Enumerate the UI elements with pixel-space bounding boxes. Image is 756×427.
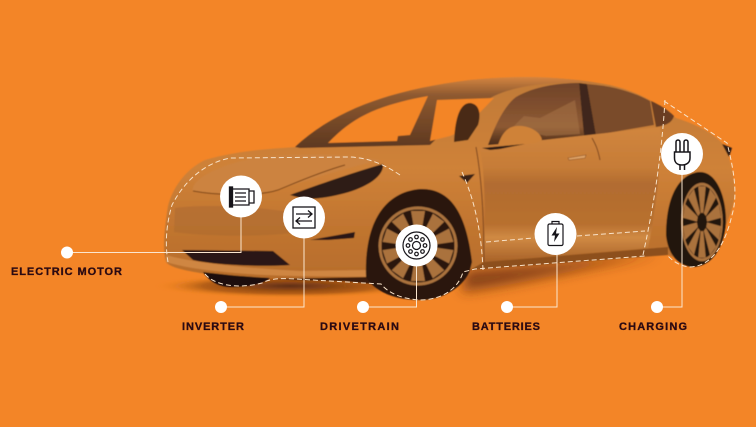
rear wheel bbox=[666, 172, 726, 267]
mirror stalk shadow bbox=[482, 144, 525, 150]
label: inverter: INVERTER bbox=[182, 321, 244, 333]
windshield bbox=[328, 96, 428, 143]
connector: batteries bbox=[501, 240, 557, 313]
side glass seen through cabin bbox=[430, 98, 494, 141]
tail light bbox=[722, 144, 732, 157]
car body bbox=[164, 77, 735, 278]
front left wheel bbox=[203, 272, 270, 287]
front bumper intake bbox=[174, 206, 300, 236]
windshield frame and roof shading bbox=[295, 77, 600, 148]
quarter glass bbox=[651, 101, 674, 127]
underbody bbox=[270, 277, 382, 285]
dashed outline: rear bbox=[643, 100, 735, 267]
door panels bbox=[480, 127, 660, 262]
connector: electric motor bbox=[61, 200, 241, 258]
label: electric motor: ELECTRIC MOTOR bbox=[11, 266, 122, 278]
bumper lip bbox=[166, 255, 380, 277]
icon: drivetrain bbox=[396, 224, 438, 266]
rear side window bbox=[587, 84, 654, 135]
door pillar bbox=[579, 83, 596, 136]
lower grille bbox=[182, 250, 290, 266]
icon: batteries bbox=[534, 213, 576, 255]
label: charging: CHARGING bbox=[619, 321, 687, 333]
door handle bbox=[568, 155, 586, 160]
label: drivetrain: DRIVETRAIN bbox=[320, 321, 399, 333]
front wheel bbox=[380, 208, 456, 284]
icon: charging plug bbox=[661, 133, 703, 175]
connector: charging bbox=[651, 160, 682, 313]
side mirror bbox=[498, 126, 542, 146]
dashed outline: front bbox=[166, 157, 400, 262]
label: batteries: BATTERIES bbox=[472, 321, 540, 333]
front side window bbox=[488, 83, 584, 145]
door cut lines bbox=[476, 138, 600, 262]
window reflections bbox=[512, 100, 580, 136]
car illustration bbox=[155, 77, 735, 300]
fog slit bbox=[310, 232, 355, 240]
front wheel arch bbox=[366, 189, 472, 300]
icon: inverter bbox=[283, 196, 325, 238]
hood highlight bbox=[193, 154, 380, 194]
connector: drivetrain bbox=[357, 250, 416, 313]
hood line bbox=[193, 165, 345, 195]
dashed outline: battery bbox=[462, 172, 645, 270]
dashed component outlines bbox=[166, 100, 735, 300]
seat silhouette bbox=[454, 103, 479, 142]
fender badge bbox=[459, 174, 475, 183]
dashed outline: underbody bbox=[205, 256, 645, 300]
icon: electric motor bbox=[220, 176, 262, 218]
sill bbox=[470, 247, 668, 270]
ground shadow bbox=[155, 254, 660, 298]
headlight bbox=[290, 164, 383, 199]
connector: inverter bbox=[215, 220, 304, 313]
